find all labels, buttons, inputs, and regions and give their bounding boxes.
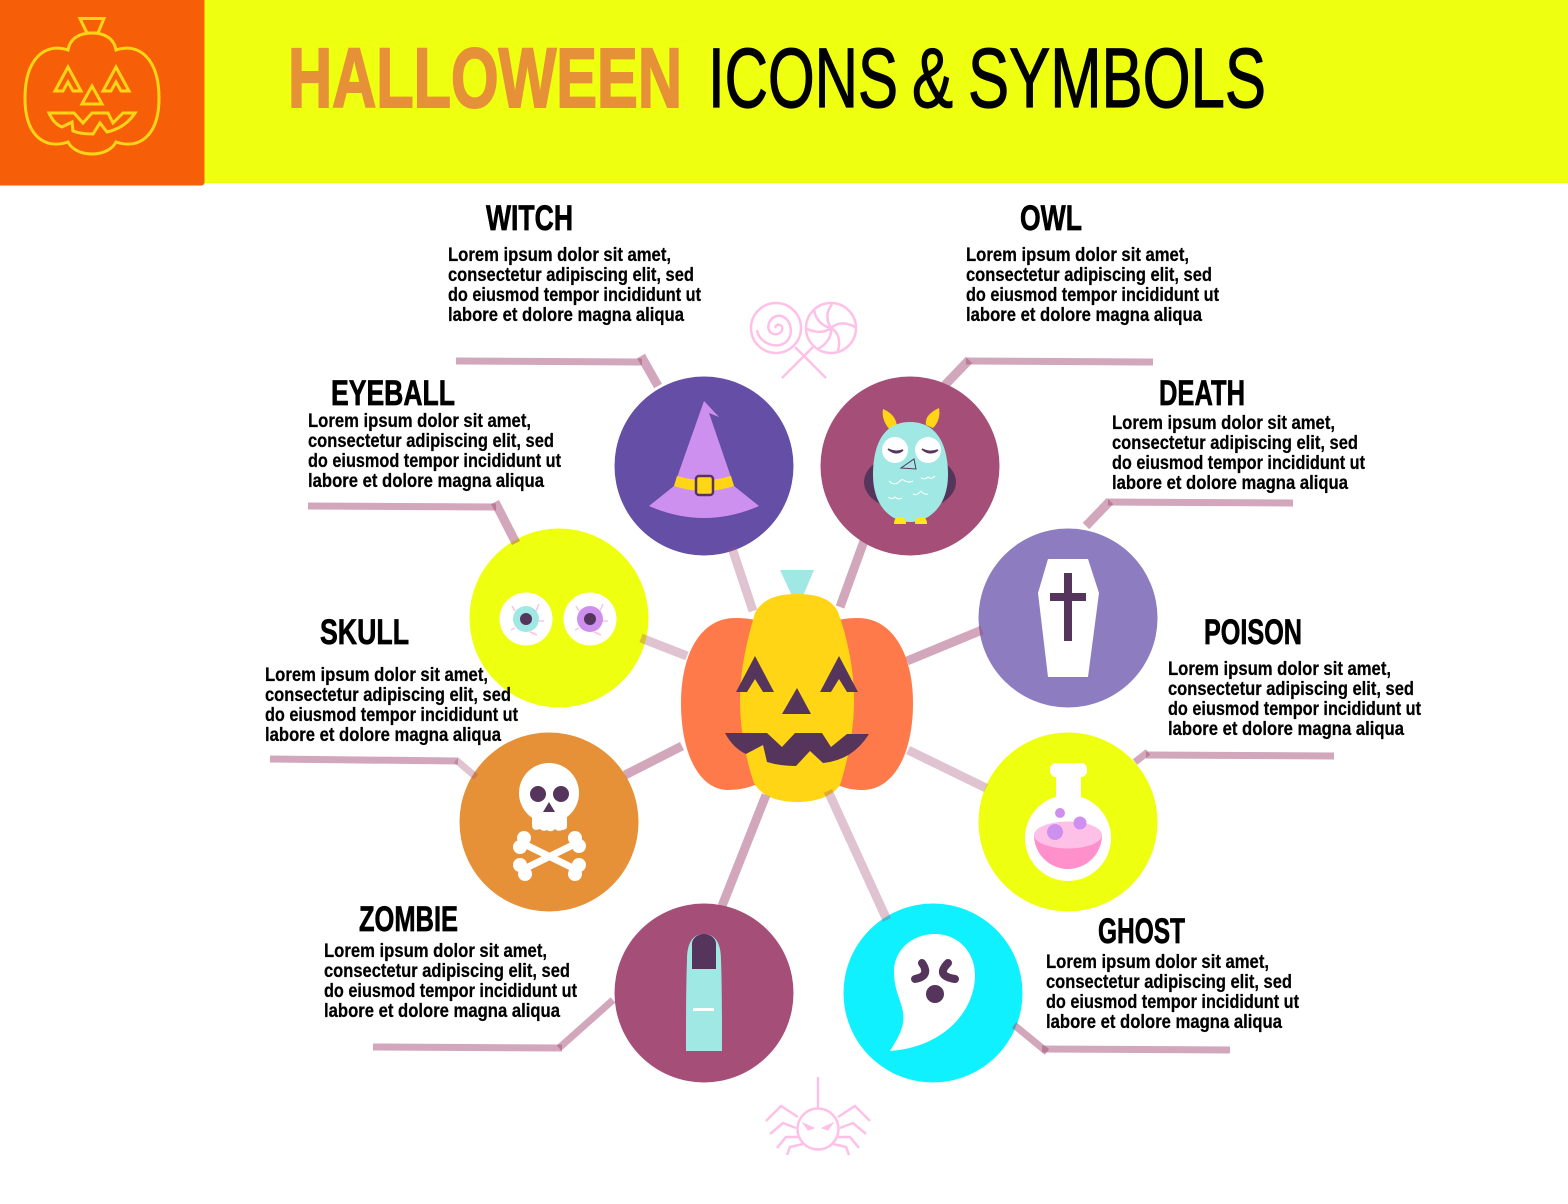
label: poison: consectetur adipiscing elit, sed: [1168, 679, 1414, 700]
header banner: [0, 0, 1568, 183]
label: skull: Lorem ipsum dolor sit amet,: [265, 665, 488, 686]
icon: poison flask: [978, 732, 1158, 912]
label: skull: SKULL: [320, 613, 409, 652]
title: &: [912, 31, 953, 125]
label: skull: [265, 613, 519, 746]
icon: spider: [766, 1077, 870, 1155]
label: eyeball: do eiusmod tempor incididunt ut: [308, 451, 562, 472]
label: owl: [966, 199, 1220, 326]
label: witch: Lorem ipsum dolor sit amet,: [448, 245, 671, 266]
icon: owl: [820, 376, 1000, 556]
icon: ghost: [844, 904, 1022, 1082]
center pumpkin: [681, 570, 913, 802]
label: eyeball: EYEBALL: [331, 374, 455, 413]
label: witch: labore et dolore magna aliqua: [448, 305, 684, 326]
label: witch: consectetur adipiscing elit, sed: [448, 265, 694, 286]
label: ghost: Lorem ipsum dolor sit amet,: [1046, 952, 1269, 973]
label: poison: POISON: [1204, 613, 1302, 652]
icon: lollipops: [751, 303, 856, 378]
label: zombie: labore et dolore magna aliqua: [324, 1001, 560, 1022]
label: poison: Lorem ipsum dolor sit amet,: [1168, 659, 1391, 680]
label: zombie: ZOMBIE: [359, 900, 458, 939]
label: death: [1112, 374, 1366, 494]
label: poison: [1168, 613, 1422, 740]
label: witch: WITCH: [486, 199, 573, 238]
icon: coffin: [978, 528, 1158, 708]
label: owl: OWL: [1020, 199, 1082, 238]
label: skull: consectetur adipiscing elit, sed: [265, 685, 511, 706]
label: death: consectetur adipiscing elit, sed: [1112, 433, 1358, 454]
label: ghost: [1046, 912, 1300, 1033]
title: [288, 31, 1266, 125]
label: death: do eiusmod tempor incididunt ut: [1112, 453, 1366, 474]
label: death: DEATH: [1159, 374, 1245, 413]
label: ghost: GHOST: [1098, 912, 1185, 951]
label: skull: labore et dolore magna aliqua: [265, 725, 501, 746]
label: eyeball: [308, 374, 562, 492]
label: death: labore et dolore magna aliqua: [1112, 473, 1348, 494]
icon: eyeballs: [470, 528, 648, 708]
label: ghost: labore et dolore magna aliqua: [1046, 1012, 1282, 1033]
icon: witch hat: [614, 376, 794, 556]
label: ghost: consectetur adipiscing elit, sed: [1046, 972, 1292, 993]
label: eyeball: Lorem ipsum dolor sit amet,: [308, 411, 531, 432]
icon: skull and crossbones: [460, 732, 638, 912]
label: owl: consectetur adipiscing elit, sed: [966, 265, 1212, 286]
label: witch: do eiusmod tempor incididunt ut: [448, 285, 702, 306]
label: zombie: Lorem ipsum dolor sit amet,: [324, 941, 547, 962]
label: witch: [448, 199, 702, 326]
label: zombie: [324, 900, 578, 1022]
header pumpkin badge: [0, 0, 204, 186]
label: eyeball: consectetur adipiscing elit, sed: [308, 431, 554, 452]
title: ICONS: [708, 31, 898, 125]
label: eyeball: labore et dolore magna aliqua: [308, 471, 544, 492]
label: skull: do eiusmod tempor incididunt ut: [265, 705, 519, 726]
label: owl: labore et dolore magna aliqua: [966, 305, 1202, 326]
label: death: Lorem ipsum dolor sit amet,: [1112, 413, 1335, 434]
label: zombie: do eiusmod tempor incididunt ut: [324, 981, 578, 1002]
label: ghost: do eiusmod tempor incididunt ut: [1046, 992, 1300, 1013]
connectors from pumpkin to icons: [625, 541, 986, 920]
label: poison: labore et dolore magna aliqua: [1168, 719, 1404, 740]
label: owl: Lorem ipsum dolor sit amet,: [966, 245, 1189, 266]
label: zombie: consectetur adipiscing elit, sed: [324, 961, 570, 982]
title: HALLOWEEN: [288, 31, 682, 125]
leader lines to labels: [270, 356, 1334, 1052]
label: owl: do eiusmod tempor incididunt ut: [966, 285, 1220, 306]
label: poison: do eiusmod tempor incididunt ut: [1168, 699, 1422, 720]
icon: zombie finger: [614, 904, 794, 1082]
title: SYMBOLS: [968, 31, 1266, 125]
